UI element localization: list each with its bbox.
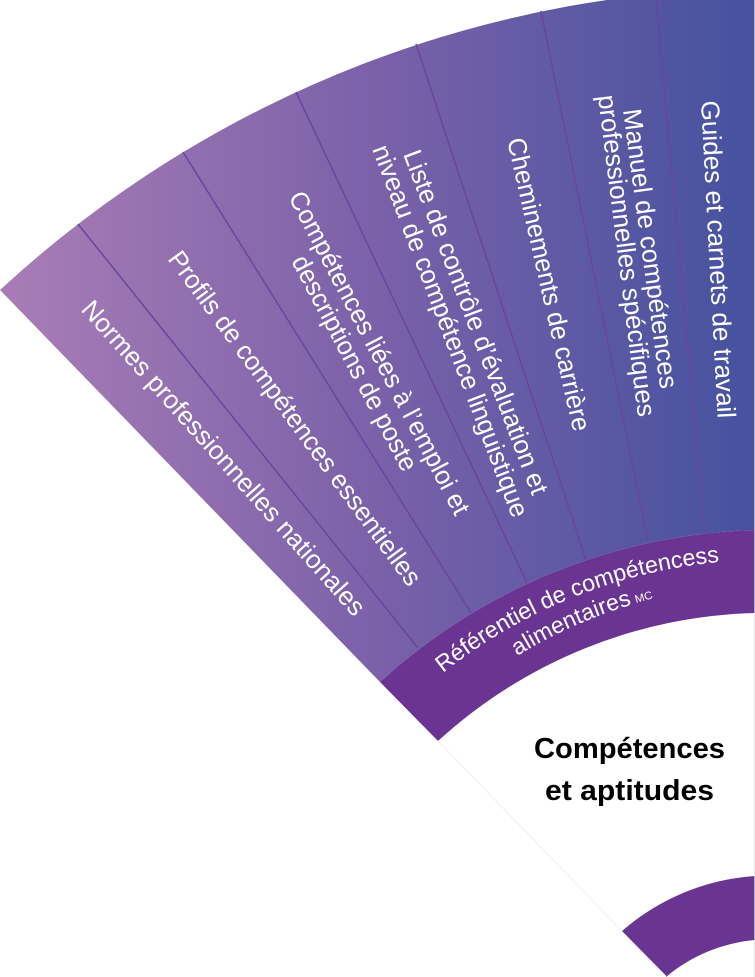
label: Compétences liées à l'emploi et descriptions de poste: descriptions de poste xyxy=(286,250,424,476)
label: Manuel de compétences professionnelles spécifiques: professionnelles spécifiques xyxy=(592,93,662,418)
label: Compétences liées à l'emploi et descriptions de poste: Compétences liées à l’emploi et xyxy=(283,186,477,520)
label: Manuel de compétences professionnelles spécifiques: Manuel de compétences xyxy=(617,107,684,390)
centre heading: et aptitudes xyxy=(545,775,714,807)
band label: Référentiel de compétences alimentaires: Référentiel de compétencess xyxy=(434,550,718,672)
label: Guides et carnets de travail: Guides et carnets de travail xyxy=(695,100,742,419)
centre heading: Compétences xyxy=(534,733,725,765)
label: Profils de compétences essentielles: Profils de compétences essentielles xyxy=(162,245,428,591)
centre heading xyxy=(534,733,725,807)
label: Liste de contrôle d'évaluation et niveau de compétence linguistique: niveau de compétence linguistique xyxy=(366,140,535,521)
purple framework band xyxy=(380,530,755,741)
bottom purple arc xyxy=(622,876,755,977)
thin wedge edge xyxy=(438,741,622,931)
label: Cheminements de carrière: Cheminements de carrière xyxy=(501,135,597,434)
gradient band xyxy=(0,0,755,682)
band label: Référentiel de compétences alimentaires: MC xyxy=(634,589,654,606)
segment dividers xyxy=(78,0,705,648)
label: Liste de contrôle d'évaluation et niveau de compétence linguistique: Liste de contrôle d’évaluation et xyxy=(397,146,555,499)
label: Normes professionnelles nationales: Normes professionnelles nationales xyxy=(76,294,372,622)
band label: Référentiel de compétences alimentaires: alimentaires xyxy=(513,594,630,654)
